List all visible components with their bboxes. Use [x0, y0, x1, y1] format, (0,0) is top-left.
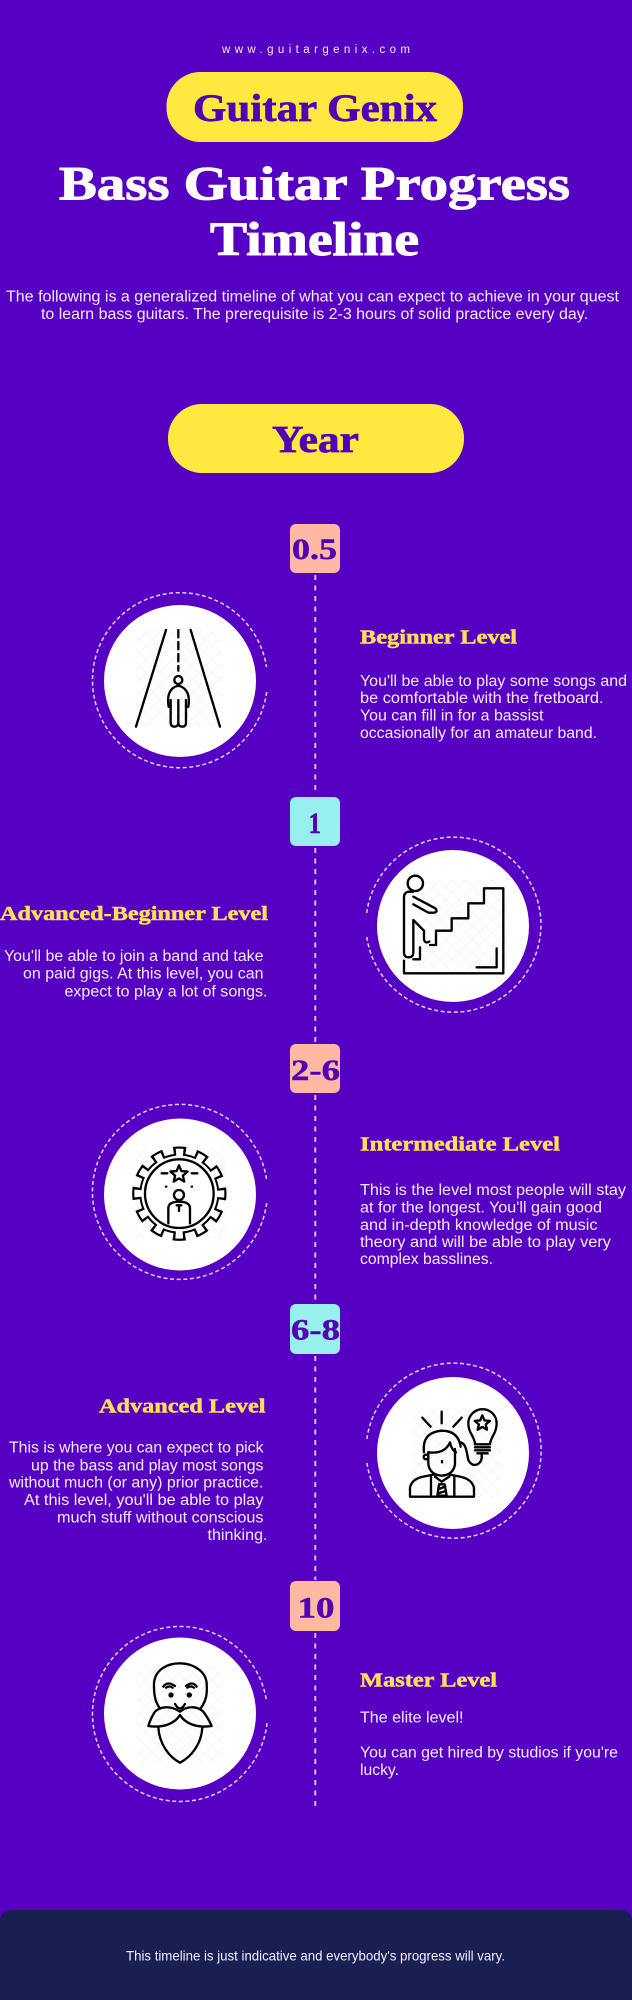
footer panel: This timeline is just indicative and everybody's progress will vary. — [126, 1948, 505, 1964]
title: Bass Guitar Progress — [59, 158, 570, 210]
icon: gear with person — [92, 1104, 267, 1279]
text: intermediate level: complex basslines. — [360, 1251, 493, 1268]
icon: road with person — [93, 593, 267, 768]
text: intermediate level: at for the longest. You'll gain good — [360, 1200, 602, 1216]
text: advanced level: much stuff without conscious — [57, 1510, 264, 1526]
title — [59, 158, 570, 266]
text: advanced-beginner level: on paid gigs. At this level, you can — [23, 966, 264, 982]
icon: person climbing stairs — [367, 837, 541, 1012]
footer panel — [0, 1910, 632, 2000]
text: intermediate level: theory and will be able to play very — [360, 1234, 611, 1251]
icon: person with light bulb idea — [367, 1363, 541, 1538]
text: beginner level: You'll be able to play some songs and — [360, 673, 627, 690]
text: beginner level: You can fill in for a bassist — [360, 708, 544, 724]
year badge 0.5: 0.5 — [292, 533, 337, 566]
year badge 2-6: 2-6 — [291, 1054, 340, 1087]
text: intermediate level: Intermediate Level — [360, 1134, 561, 1156]
year badge 1: 1 — [308, 807, 321, 840]
text: intermediate level — [360, 1134, 626, 1268]
year badge 6-8: 6-8 — [291, 1314, 340, 1346]
year badge 0.5 — [290, 524, 340, 573]
text: advanced-beginner level: expect to play a lot of songs. — [64, 984, 268, 1000]
year badge 2-6 — [290, 1044, 340, 1093]
text: advanced level: This is where you can expect to pick — [9, 1440, 264, 1456]
text: advanced-beginner level — [0, 903, 269, 1000]
text: advanced-beginner level: You'll be able to join a band and take — [4, 948, 264, 965]
website url: www.guitargenix.com — [221, 44, 410, 56]
intro text: The following is a generalized timeline of what you can expect to achieve in your quest — [6, 288, 620, 306]
text: advanced level: At this level, you'll be able to play — [24, 1492, 264, 1509]
year badge 1 — [290, 797, 340, 846]
year pill: Year — [272, 419, 359, 461]
text: advanced level — [8, 1396, 268, 1544]
year badge 10 — [290, 1581, 340, 1631]
text: master level: lucky. — [360, 1762, 399, 1779]
text: advanced-beginner level: Advanced-Beginner Level — [0, 903, 269, 925]
text: advanced level: Advanced Level — [99, 1396, 266, 1418]
text: beginner level: be comfortable with the fretboard. — [360, 690, 604, 707]
text: advanced level: thinking. — [208, 1527, 268, 1544]
icon: bearded master — [92, 1626, 267, 1801]
intro text: to learn bass guitars. The prerequisite is 2-3 hours of solid practice every day. — [41, 306, 588, 323]
text: master level: Master Level — [360, 1670, 498, 1692]
text: intermediate level: and in-depth knowledge of music — [360, 1217, 598, 1234]
title: Timeline — [210, 213, 419, 266]
text: beginner level: occasionally for an amateur band. — [360, 725, 597, 742]
year pill — [168, 404, 464, 473]
brand pill — [166, 72, 463, 142]
text: beginner level: Beginner Level — [360, 626, 518, 648]
year badge 10: 10 — [298, 1592, 334, 1624]
text: master level: The elite level! — [360, 1710, 464, 1726]
brand pill: Guitar Genix — [193, 87, 438, 130]
text: master level — [360, 1670, 618, 1779]
text: intermediate level: This is the level most people will stay — [360, 1182, 626, 1199]
year badge 6-8 — [290, 1304, 340, 1354]
text: beginner level — [360, 626, 627, 742]
text: advanced level: up the bass and play most songs — [31, 1458, 264, 1474]
intro text — [6, 288, 620, 323]
text: advanced level: without much (or any) prior practice. — [8, 1474, 264, 1492]
timeline dashed line — [314, 575, 316, 1811]
text: master level: You can get hired by studios if you're — [360, 1744, 618, 1762]
